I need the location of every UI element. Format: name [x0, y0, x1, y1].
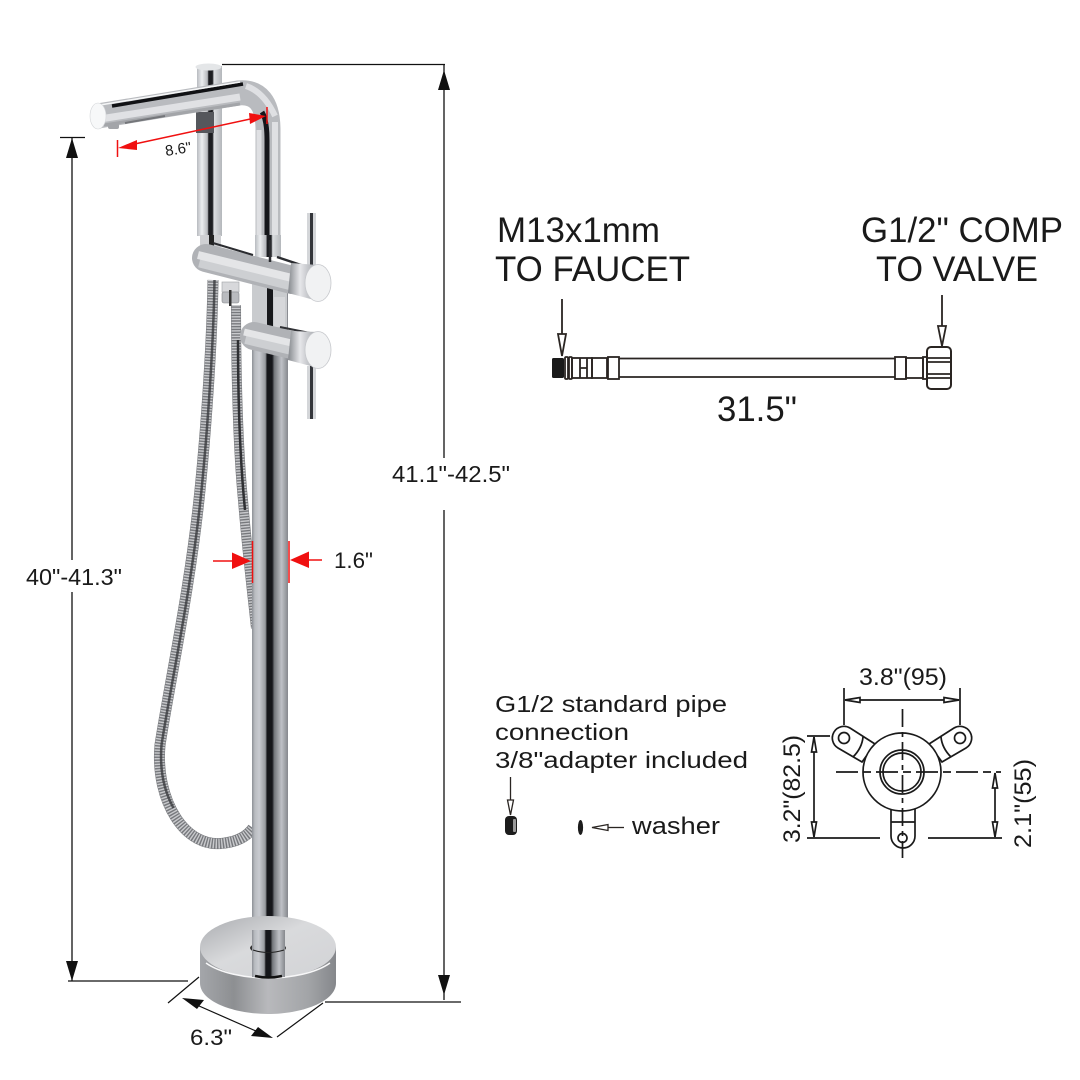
dimension: base diameter 6.3: 6.3"	[190, 1025, 232, 1050]
round floor base	[200, 916, 336, 1014]
supply hose diagram	[552, 295, 951, 389]
threaded tip	[552, 358, 564, 378]
heading: valve connection: G1/2" COMP	[861, 211, 1063, 250]
dimension: pole diameter 1.6	[213, 541, 373, 583]
left fittings	[565, 357, 619, 379]
arrow: to faucet end	[558, 299, 566, 356]
upper collar	[255, 235, 281, 257]
hex nut	[927, 347, 951, 389]
label: washer: washer	[631, 813, 720, 840]
hose connector	[222, 282, 239, 306]
dimension: overall height 41.1-42.5: 41.1"-42.5"	[392, 461, 510, 487]
right fittings	[895, 357, 927, 379]
dimension: total depth	[807, 736, 1002, 838]
dimension: spout height 40-41.3	[26, 137, 188, 981]
lower mixer body	[244, 327, 310, 384]
icon: adapter with arrow	[505, 777, 517, 835]
hand shower hose	[159, 280, 256, 844]
heading: valve connection	[861, 211, 1063, 289]
mounting bracket diagram	[807, 688, 1002, 858]
heading: faucet connection: M13x1mm	[497, 211, 660, 250]
bracket hub	[863, 733, 941, 811]
dimension: spout reach 8.6	[118, 107, 267, 160]
hose tube	[619, 358, 895, 377]
note: pipe connection: G1/2 standard pipe	[495, 691, 727, 717]
dimension: centre to lug	[992, 773, 998, 837]
heading: valve connection: TO VALVE	[876, 250, 1038, 289]
stem between mixers	[252, 280, 287, 340]
dimension: spout reach 8.6: 8.6"	[164, 139, 192, 160]
heading: faucet connection	[495, 211, 690, 289]
faucet photo illustration	[90, 64, 336, 1014]
centre lines	[902, 709, 904, 858]
label: hose length: 31.5"	[717, 390, 797, 429]
upper temperature cap	[288, 263, 331, 302]
note: pipe connection: connection	[495, 719, 629, 745]
dimension: spout height 40-41.3: 40"-41.3"	[26, 564, 122, 590]
bracket lugs	[832, 726, 972, 848]
note: pipe connection	[495, 691, 748, 773]
upper lever	[307, 213, 316, 267]
main pole	[252, 285, 288, 935]
label: 2.1 in offset: 2.1"(55)	[1010, 759, 1037, 848]
label: 3.2 in depth: 3.2"(82.5)	[779, 735, 806, 843]
upper mixer body	[198, 240, 310, 283]
icon: washer with arrow	[578, 820, 624, 835]
dimension: overall height 41.1-42.5	[222, 64, 510, 1002]
note: pipe connection: 3/8"adapter included	[495, 747, 748, 773]
dimension: base diameter 6.3	[168, 977, 323, 1050]
dimension: pole diameter 1.6: 1.6"	[334, 548, 373, 573]
label: 3.8 in spacing: 3.8"(95)	[859, 664, 947, 691]
lower lever	[307, 366, 316, 419]
spout outlet	[90, 103, 119, 129]
heading: faucet connection: TO FAUCET	[495, 250, 690, 289]
left riser pipe with cap	[196, 64, 222, 247]
spout	[98, 82, 275, 238]
pole collar at base	[250, 930, 286, 978]
arrow: to valve end	[938, 295, 946, 346]
lower control cap	[288, 331, 331, 368]
dimension: lug spacing	[844, 688, 960, 725]
